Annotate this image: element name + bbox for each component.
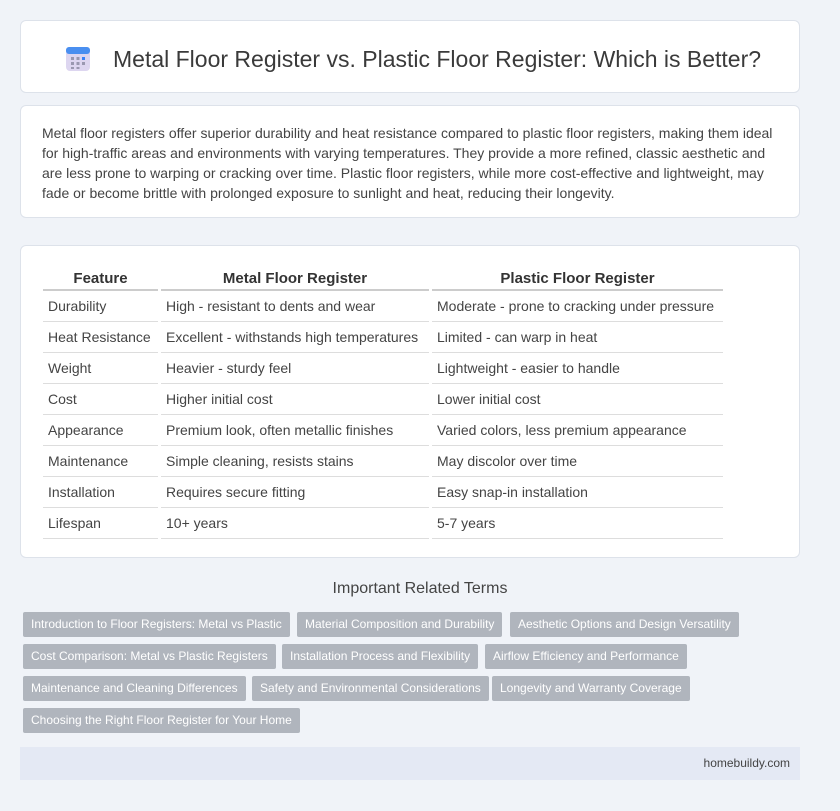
related terms tags: Longevity and Warranty Coverage (500, 681, 682, 695)
summary text panel (20, 105, 800, 218)
comparison table panel: Cost (48, 391, 77, 407)
comparison table panel: Moderate - prone to cracking under pressure (437, 298, 714, 314)
comparison table panel: May discolor over time (437, 453, 577, 469)
icon: calendar (66, 47, 90, 71)
comparison table panel: Maintenance (48, 453, 128, 469)
comparison table panel: Plastic Floor Register (500, 270, 655, 287)
footer: homebuildy.com (704, 756, 790, 770)
comparison table panel: Metal Floor Register (223, 270, 367, 287)
comparison table panel: Durability (48, 298, 106, 314)
related terms tags: Material Composition and Durability (305, 617, 494, 631)
related terms tags: Choosing the Right Floor Register for Your Home (31, 713, 292, 727)
comparison table panel: Premium look, often metallic finishes (166, 422, 393, 438)
related terms tags: Introduction to Floor Registers: Metal vs Plastic (31, 617, 282, 631)
footer (20, 747, 800, 780)
comparison table panel: Requires secure fitting (166, 484, 305, 500)
title: Metal Floor Register vs. Plastic Floor Register: Which is Better? (113, 46, 761, 72)
comparison table panel: Easy snap-in installation (437, 484, 588, 500)
related terms tags: Aesthetic Options and Design Versatility (518, 617, 731, 631)
comparison table panel: Higher initial cost (166, 391, 273, 407)
comparison table panel: 10+ years (166, 515, 228, 531)
comparison table panel: Heat Resistance (48, 329, 151, 345)
comparison table panel: Lightweight - easier to handle (437, 360, 620, 376)
related terms tags: Cost Comparison: Metal vs Plastic Registers (31, 649, 268, 663)
related terms tags: Safety and Environmental Considerations (260, 681, 481, 695)
comparison table panel: Excellent - withstands high temperatures (166, 329, 418, 345)
comparison table panel (20, 245, 800, 558)
header panel (20, 20, 800, 93)
summary text panel: Metal floor registers offer superior durability and heat resistance compared to plastic floor registers, making them ideal for high-traffic areas and environments with varying temperatures. They provide a more refined, classic aesthetic and are less prone to warping or cracking over time. Plastic floor registers, while more cost-effective and lightweight, may fade or become brittle with prolonged exposure to sunlight and heat, reducing their longevity. (42, 125, 772, 201)
related terms tags: Airflow Efficiency and Performance (493, 649, 679, 663)
comparison table panel: Lifespan (48, 515, 101, 531)
related terms tags: Maintenance and Cleaning Differences (31, 681, 238, 695)
comparison table panel: Lower initial cost (437, 391, 540, 407)
comparison table panel: Simple cleaning, resists stains (166, 453, 354, 469)
comparison table panel: Feature (73, 270, 128, 287)
comparison table panel: Appearance (48, 422, 124, 438)
comparison table panel: Limited - can warp in heat (437, 329, 597, 345)
comparison table panel: Varied colors, less premium appearance (437, 422, 687, 438)
comparison table panel: Weight (48, 360, 91, 376)
comparison table panel: High - resistant to dents and wear (166, 298, 375, 314)
comparison table panel: Installation (48, 484, 115, 500)
related terms tags: Installation Process and Flexibility (290, 649, 470, 663)
comparison table panel: Heavier - sturdy feel (166, 360, 291, 376)
comparison table panel: 5-7 years (437, 515, 495, 531)
related terms heading: Important Related Terms (333, 580, 507, 597)
